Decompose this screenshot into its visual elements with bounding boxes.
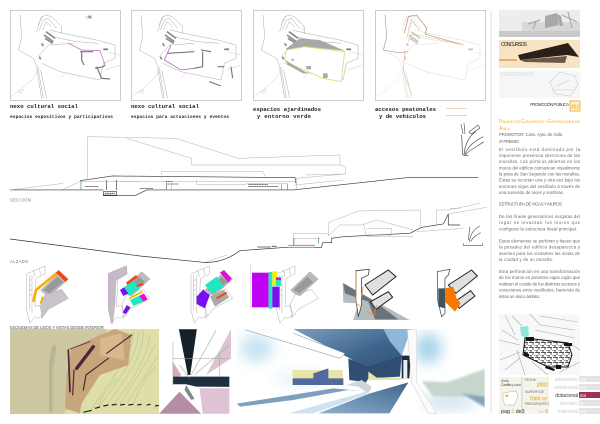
upper volume outline bbox=[88, 137, 345, 178]
text: body paragraph 2: lugar se levantan los muros que bbox=[499, 220, 581, 225]
text: body paragraph 4: de los muros en potentes vigas cajón que bbox=[499, 275, 581, 280]
ceiling bbox=[293, 329, 411, 377]
side stripe bbox=[490, 10, 492, 414]
subheading: espacios para actuaciones: espacios para actuaciones y eventos bbox=[131, 114, 229, 120]
text: body paragraph 1: imponente presencia silenciosa de las bbox=[499, 153, 580, 158]
text: promotor bbox=[499, 132, 563, 144]
category urbanismo: urb bbox=[580, 377, 587, 382]
text: body paragraph 4 bbox=[499, 269, 581, 299]
text: body paragraph 4: éstos un único ámbito. bbox=[499, 294, 540, 299]
text: body paragraph 4: conexiones entre vestíbulos, haciendo de bbox=[499, 288, 581, 293]
surface: SUPERFICIE bbox=[525, 390, 544, 394]
panel: map expositive spaces bbox=[10, 10, 120, 100]
small labels bbox=[85, 182, 278, 193]
text: body paragraph 4: realizan el cosido de los distintos accesos y bbox=[499, 281, 581, 286]
badge: PU bbox=[570, 101, 580, 111]
green and wall highlights bbox=[285, 20, 345, 82]
investigación label: INVESTIGACIÓN bbox=[501, 71, 534, 78]
text: body paragraph 3: Estos elementos se perforan y hacen que bbox=[499, 238, 581, 244]
base map 1 bbox=[10, 15, 120, 98]
encargos building image bbox=[499, 12, 580, 37]
map: city of Ávila bbox=[499, 314, 580, 375]
heading: estructura: ESTRUCTURA DE VIGAS Y MUROS bbox=[499, 202, 562, 206]
title: palacio de congresos: Ávila bbox=[499, 125, 510, 132]
investigación map sketch bbox=[550, 72, 578, 96]
text: body paragraph 2: De las líneas generatrices surgidas del bbox=[499, 214, 580, 219]
walled city block bbox=[523, 338, 572, 367]
icon: small plan marker bbox=[461, 123, 480, 134]
access route highlights bbox=[383, 15, 463, 95]
label: alzado: ALZADO bbox=[10, 259, 29, 264]
route highlights 1 bbox=[68, 43, 110, 79]
base map 4 bbox=[375, 15, 485, 98]
stair silhouettes bbox=[83, 404, 159, 412]
menu: categories bbox=[554, 376, 600, 415]
text: body paragraph 1: la pista de San Segundo con las murallas. bbox=[499, 172, 580, 176]
text: body paragraph 3: la pesadez del edificio desaparezca y bbox=[499, 245, 581, 250]
text: body paragraph 1: muros del edificio comunican visualmente bbox=[499, 165, 581, 170]
north marker: ⌂N bbox=[86, 14, 91, 20]
dark landmarks bbox=[524, 337, 572, 371]
watercolor: vertical space bbox=[159, 329, 231, 414]
icon: section marker bbox=[462, 132, 484, 155]
concursos label: CONCURSOS bbox=[501, 42, 528, 48]
model left ground bbox=[10, 329, 107, 414]
budget: PRESUPUESTO bbox=[525, 402, 550, 406]
plan 6 bbox=[437, 269, 477, 317]
chart: plan schemes row bbox=[27, 265, 477, 323]
sky washes bbox=[240, 333, 477, 410]
date value: 2002 bbox=[537, 382, 548, 388]
category industrial: ind bbox=[580, 409, 586, 414]
category terciario: terciario bbox=[560, 401, 578, 407]
Spain mini map bbox=[503, 391, 518, 405]
icon: elevation marker bbox=[463, 226, 483, 245]
page number: pag 2 de3 bbox=[501, 409, 525, 415]
opening bbox=[402, 356, 411, 378]
photo: model bbox=[10, 329, 159, 414]
steps bbox=[288, 245, 315, 247]
text: promotor: 2º PREMIO bbox=[499, 139, 520, 144]
chart: elevation drawing bbox=[10, 203, 487, 262]
panel: map access bbox=[375, 10, 486, 100]
text: body paragraph 3: la ciudad y de su muralla. bbox=[499, 257, 553, 262]
text: body paragraph 1: una sucesión de luces y sombras. bbox=[499, 190, 564, 195]
central column bbox=[348, 356, 402, 382]
landscape right bbox=[422, 369, 485, 407]
ground line bbox=[10, 176, 478, 196]
date: FECHA bbox=[525, 378, 537, 382]
text: body paragraph 3 bbox=[499, 238, 581, 262]
right wall bbox=[407, 330, 437, 413]
heading: espacios ajardinados: espacios ajardinados bbox=[253, 106, 322, 113]
plan 4 bbox=[250, 265, 318, 323]
category industrial: industrial bbox=[558, 409, 578, 415]
text: body paragraph 1: Éstas se recortan una y otra vez bajo las bbox=[499, 178, 580, 183]
surface value: 7000 m² bbox=[529, 396, 548, 402]
badge: PU: PU bbox=[571, 104, 579, 111]
budget value: --- € bbox=[539, 409, 548, 415]
pink washes bbox=[199, 329, 231, 414]
title: palacio de congresos: Palacio de Congresos y Exposiciones de bbox=[499, 119, 580, 125]
horizon band bbox=[173, 377, 229, 387]
text: body paragraph 3: asomen para los visitantes las vistas de bbox=[499, 251, 581, 256]
floor bbox=[318, 382, 408, 413]
panel: investigación bbox=[499, 71, 580, 98]
terrain ridge bbox=[50, 345, 55, 412]
blue columns bbox=[81, 180, 287, 190]
sketch lines bbox=[173, 330, 229, 385]
label: promoción pública: PROMOCIÓN PÚBLICA bbox=[530, 102, 569, 107]
text: body paragraph 1 bbox=[499, 147, 581, 195]
text: body paragraph 1: enormes vigas del vestíbulo a través de bbox=[499, 184, 581, 189]
text: body paragraph 2 bbox=[499, 214, 581, 231]
category dotacional: dotacional bbox=[555, 393, 578, 399]
green area bbox=[520, 326, 529, 338]
text: promotor: PROMOTOR: Cons. Ayto. de Ávila bbox=[499, 132, 563, 137]
panel: encargos bbox=[499, 10, 580, 37]
left beam bbox=[245, 330, 345, 358]
plan 5 bbox=[343, 269, 411, 320]
panel: project data bbox=[499, 377, 550, 415]
concursos roof shape bbox=[499, 43, 579, 63]
category terciario: ter bbox=[580, 401, 586, 406]
subheading: entorno verde: y entorno verde bbox=[257, 113, 312, 120]
location text: Ávila bbox=[501, 379, 509, 383]
region text: Castilla y León bbox=[501, 383, 521, 387]
tan volume bbox=[65, 329, 132, 413]
category residencial: res bbox=[580, 385, 587, 390]
category residencial: residencial bbox=[554, 385, 578, 391]
heading: nexo cultural social 1: nexo cultural social bbox=[10, 103, 79, 110]
label: esquemas de usos: ESQUEMAS DE USOS Y VISTAS DESDE INTERIOR bbox=[10, 325, 104, 330]
dark cone bbox=[179, 329, 197, 375]
category urbanismo bbox=[555, 376, 600, 383]
plan 1 bbox=[27, 266, 68, 323]
interior bbox=[10, 178, 343, 190]
blue elements bbox=[294, 237, 332, 245]
window left bbox=[293, 370, 343, 385]
contour lines bbox=[90, 332, 158, 412]
subheading: y de vehículos: y de vehículos bbox=[379, 113, 427, 120]
base map 3 bbox=[253, 15, 363, 98]
chart: section drawing bbox=[10, 132, 484, 196]
text: body paragraph 1: murallas. Los pórticos abiertos en los bbox=[499, 159, 580, 164]
category terciario bbox=[560, 400, 600, 407]
encargos label: ENCARGOS bbox=[501, 12, 526, 18]
base map 2 bbox=[131, 15, 241, 98]
dark walls bbox=[68, 335, 132, 395]
panel: map events spaces bbox=[131, 10, 242, 100]
category residencial bbox=[554, 384, 600, 391]
terrain line bbox=[10, 214, 460, 262]
heading: nexo cultural social 2: nexo cultural social bbox=[131, 103, 200, 110]
category industrial bbox=[558, 408, 600, 415]
text: body paragraph 1: El vestíbulo está dominado por la bbox=[499, 147, 581, 152]
category dotacional bbox=[555, 392, 600, 399]
route highlights 2 bbox=[164, 45, 233, 86]
city surroundings bbox=[499, 314, 580, 375]
panel: concursos bbox=[499, 40, 580, 68]
building outline bbox=[207, 203, 487, 262]
watercolor: main interior bbox=[236, 329, 485, 414]
plan 3 bbox=[191, 266, 233, 323]
plan 2 bbox=[108, 266, 150, 323]
title: palacio de congresos bbox=[499, 119, 580, 132]
text: body paragraph 4: Esta perforación es una transformación bbox=[499, 269, 581, 274]
label: sección: SECCIÓN bbox=[10, 198, 31, 202]
subheading: espacios expositivos: espacios expositivos y participativos bbox=[10, 114, 113, 120]
category urbanismo: urbanismo bbox=[555, 377, 578, 383]
category dotacional: dot bbox=[580, 393, 587, 398]
small label bbox=[257, 245, 277, 248]
divider bbox=[521, 377, 523, 414]
legend lines bbox=[446, 108, 467, 116]
text: body paragraph 2: configurar la estructura lineal principal. bbox=[499, 226, 577, 231]
heading: accesos peatonales: accesos peatonales bbox=[375, 106, 437, 113]
panel: map green spaces bbox=[253, 10, 364, 100]
